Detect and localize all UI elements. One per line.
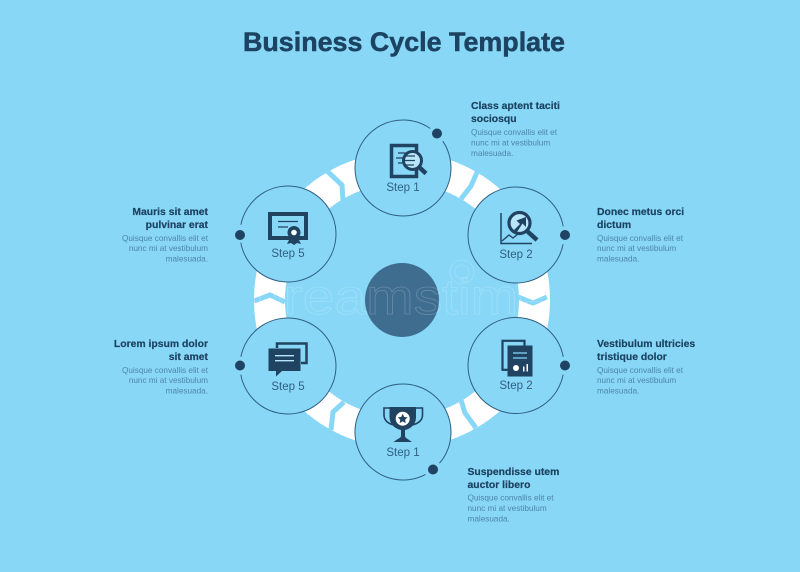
step circle: bottom	[338, 367, 468, 497]
icon: certificate	[270, 214, 306, 245]
text block: bottom: Suspendisse utem	[468, 467, 559, 478]
text block: lower left	[114, 339, 209, 396]
text block: top right: Quisque convallis elit et	[471, 128, 558, 137]
watermark: dreamstime	[252, 269, 550, 325]
icon: chat bubbles	[268, 344, 306, 376]
text block: bottom: auctor libero	[468, 480, 530, 491]
text block: lower left: Quisque convallis elit et	[122, 366, 209, 375]
step label: Step 5	[271, 381, 305, 393]
text block: lower right: tristique dolor	[597, 352, 667, 363]
step circle: upper left	[232, 178, 344, 290]
step label: Step 2	[499, 380, 533, 392]
text block: upper left: malesuada.	[166, 254, 208, 264]
icon: chart with magnifier	[501, 212, 537, 244]
text block: bottom: Quisque convallis elit et	[468, 494, 554, 502]
text block: lower left: Lorem ipsum dolor	[114, 339, 208, 350]
text block: upper left: nunc mi at vestibulum	[129, 244, 208, 253]
text block: lower left: nunc mi at vestibulum	[129, 376, 208, 385]
step circle: lower right	[460, 309, 572, 422]
text block: bottom: nunc mi at vestibulum	[468, 504, 547, 513]
text block: upper right: Quisque convallis elit et	[597, 234, 684, 243]
text block: lower left: sit amet	[169, 352, 209, 363]
step circle: upper right	[460, 179, 572, 291]
text block: lower right: malesuada.	[597, 386, 639, 396]
text block: upper left: pulvinar erat	[146, 220, 209, 231]
icon: trophy	[384, 407, 422, 442]
text block: upper right	[597, 207, 684, 264]
text block: upper right: malesuada.	[597, 254, 639, 264]
text block: top right: nunc mi at vestibulum	[471, 138, 550, 148]
text block: upper left: Quisque convallis elit et	[122, 234, 209, 243]
text block: lower right: nunc mi at vestibulum	[597, 376, 676, 385]
step label: Step 1	[386, 447, 420, 459]
icon: documents	[502, 341, 532, 376]
icon: document with magnifier	[392, 146, 426, 176]
text block: top right	[471, 101, 560, 158]
text block: top right: Class aptent taciti	[471, 101, 560, 112]
text block: lower right	[597, 339, 695, 396]
text block: upper right: Donec metus orci	[597, 207, 684, 218]
text block: top right: malesuada.	[471, 149, 513, 158]
title: Business Cycle Template	[243, 27, 565, 57]
step label: Step 1	[386, 182, 420, 194]
center circle	[365, 263, 439, 337]
step label: Step 2	[499, 249, 533, 261]
text block: top right: sociosqu	[471, 114, 517, 125]
text block: upper right: nunc mi at vestibulum	[597, 244, 676, 253]
step circle: lower left	[232, 310, 344, 422]
text block: upper left: Mauris sit amet	[132, 207, 209, 218]
text block: lower right: Quisque convallis elit et	[597, 366, 684, 375]
text block: bottom: malesuada.	[468, 514, 510, 524]
text block: lower right: Vestibulum ultricies	[597, 339, 695, 350]
step circle: top	[336, 101, 470, 235]
text block: upper right: dictum	[597, 220, 631, 231]
cycle ring with chevrons	[254, 168, 547, 432]
text block: upper left	[122, 207, 209, 264]
text block: bottom	[468, 467, 559, 524]
text block: lower left: malesuada.	[166, 386, 208, 396]
step label: Step 5	[271, 248, 305, 260]
